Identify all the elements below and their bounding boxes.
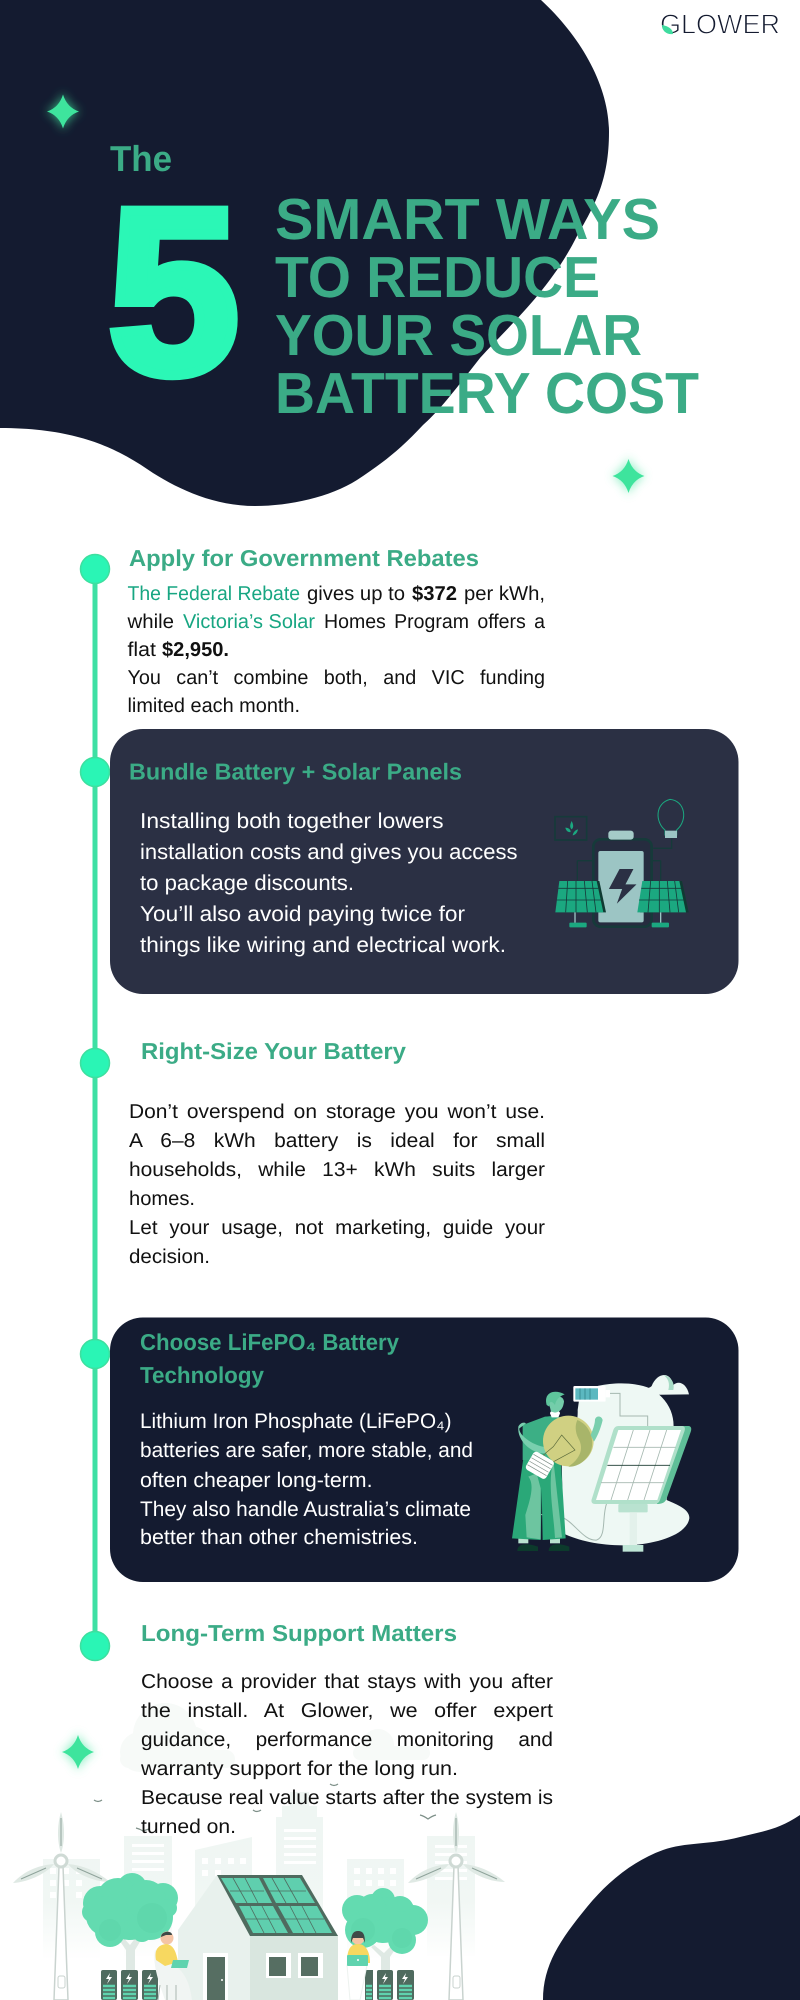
footer dark blob <box>543 1815 800 2000</box>
faint clouds <box>120 1703 430 1774</box>
heading: right-size: Right-Size Your Battery <box>141 1038 406 1064</box>
section 3: right-size battery <box>129 1038 545 1268</box>
title: The: The <box>110 138 172 179</box>
section 1: government rebates <box>126 545 546 717</box>
illustration: person with bulb and solar panel <box>512 1375 691 1552</box>
text block: LiFePO4: batteries are safer, more stable, and <box>140 1439 473 1462</box>
text block: bundle <box>140 809 518 957</box>
bottom illustration: solar house with city <box>13 1703 505 2000</box>
text block: bundle: You’ll also avoid paying twice for <box>140 902 465 926</box>
timeline <box>80 554 110 1660</box>
panel: bundle battery and solar <box>110 729 738 994</box>
text block: bundle: things like wiring and electrical work. <box>140 933 506 957</box>
tree right <box>342 1888 428 1970</box>
text block: right-size: households, while 13+ kWh suits larger <box>129 1159 545 1181</box>
wind turbine right <box>408 1812 505 2000</box>
text block: rebates: limited each month. <box>128 695 300 717</box>
text block: support: Choose a provider that stays with you after <box>141 1671 553 1693</box>
title: main heading: YOUR SOLAR <box>275 303 642 368</box>
panel: LiFePO4 technology <box>110 1318 738 1582</box>
text block: rebates: The Federal Rebate <box>128 583 300 605</box>
city buildings <box>43 1792 475 1959</box>
house <box>178 1875 338 2000</box>
text block: right-size: homes. <box>129 1188 195 1210</box>
logo: Glower: GLOWER <box>660 8 780 40</box>
heading: bundle: Bundle Battery + Solar Panels <box>129 758 462 784</box>
title <box>108 138 699 426</box>
heading: support: Long-Term Support Matters <box>141 1620 457 1646</box>
text block: LiFePO4: Lithium Iron Phosphate (LiFePO₄) <box>140 1410 452 1433</box>
birds <box>94 1784 436 1831</box>
text block: rebates: per kWh, <box>464 583 545 605</box>
text block: support: warranty support for the long run. <box>140 1758 458 1780</box>
text block: support: Because real value starts after the system is <box>141 1787 553 1809</box>
text block: rebates: Victoria’s Solar <box>183 611 315 633</box>
heading: rebates: Apply for Government Rebates <box>129 545 479 571</box>
text block: rebates: $2,950. <box>162 639 229 661</box>
text block: right-size: Don’t overspend on storage you won’t use. <box>129 1101 545 1123</box>
text block: bundle: to package discounts. <box>140 871 354 895</box>
batteries right <box>365 1970 414 2000</box>
text block: rebates <box>126 583 546 717</box>
text block: LiFePO4: often cheaper long-term. <box>140 1469 372 1492</box>
wind turbine left <box>13 1812 110 2000</box>
sparkle: below title <box>612 457 646 495</box>
text block: rebates: You can’t combine both, and VIC funding <box>128 667 545 689</box>
title: big number 5: 5 <box>108 160 239 424</box>
heading: LiFePO4 <box>140 1329 399 1388</box>
text block: rebates: gives up to <box>307 583 405 605</box>
text block: right-size: A 6–8 kWh battery is ideal for small <box>129 1130 545 1152</box>
sparkle: bottom left <box>61 1733 95 1771</box>
title: main heading: SMART WAYS <box>275 187 660 252</box>
person right with laptop <box>347 1931 370 2000</box>
text block: support: turned on. <box>141 1816 236 1838</box>
text block: LiFePO4: They also handle Australia’s climate <box>140 1498 471 1521</box>
text block: right-size: Let your usage, not marketing, guide your <box>129 1217 545 1239</box>
text block: bundle: installation costs and gives you access <box>140 840 518 864</box>
title: main heading <box>275 187 699 426</box>
person left with laptop <box>154 1932 192 2000</box>
tree left <box>82 1873 178 1970</box>
title: main heading: TO REDUCE <box>275 245 600 310</box>
text block: rebates: $372 <box>412 583 457 605</box>
heading: LiFePO4: Choose LiFePO₄ Battery <box>140 1329 399 1355</box>
header dark blob <box>0 0 609 506</box>
text block: rebates: flat <box>128 639 156 661</box>
text block: bundle: Installing both together lowers <box>140 809 444 833</box>
text block: LiFePO4: better than other chemistries. <box>140 1526 418 1549</box>
heading: LiFePO4: Technology <box>140 1362 264 1388</box>
text block: rebates: while <box>126 611 174 633</box>
text block: support: guidance, performance monitoring and <box>141 1729 553 1751</box>
text block: support <box>140 1671 553 1838</box>
sparkle: top left <box>46 92 80 130</box>
batteries left <box>101 1970 158 2000</box>
text block: right-size: decision. <box>129 1246 210 1268</box>
icon: battery with solar panels <box>555 799 689 927</box>
title: main heading: BATTERY COST <box>275 361 699 426</box>
text block: right-size <box>129 1101 545 1268</box>
section 5: long-term support <box>140 1620 553 1838</box>
text block: rebates: Homes Program offers a <box>324 611 546 633</box>
text block: LiFePO4 <box>140 1410 473 1549</box>
text block: support: the install. At Glower, we offer expert <box>141 1700 553 1722</box>
